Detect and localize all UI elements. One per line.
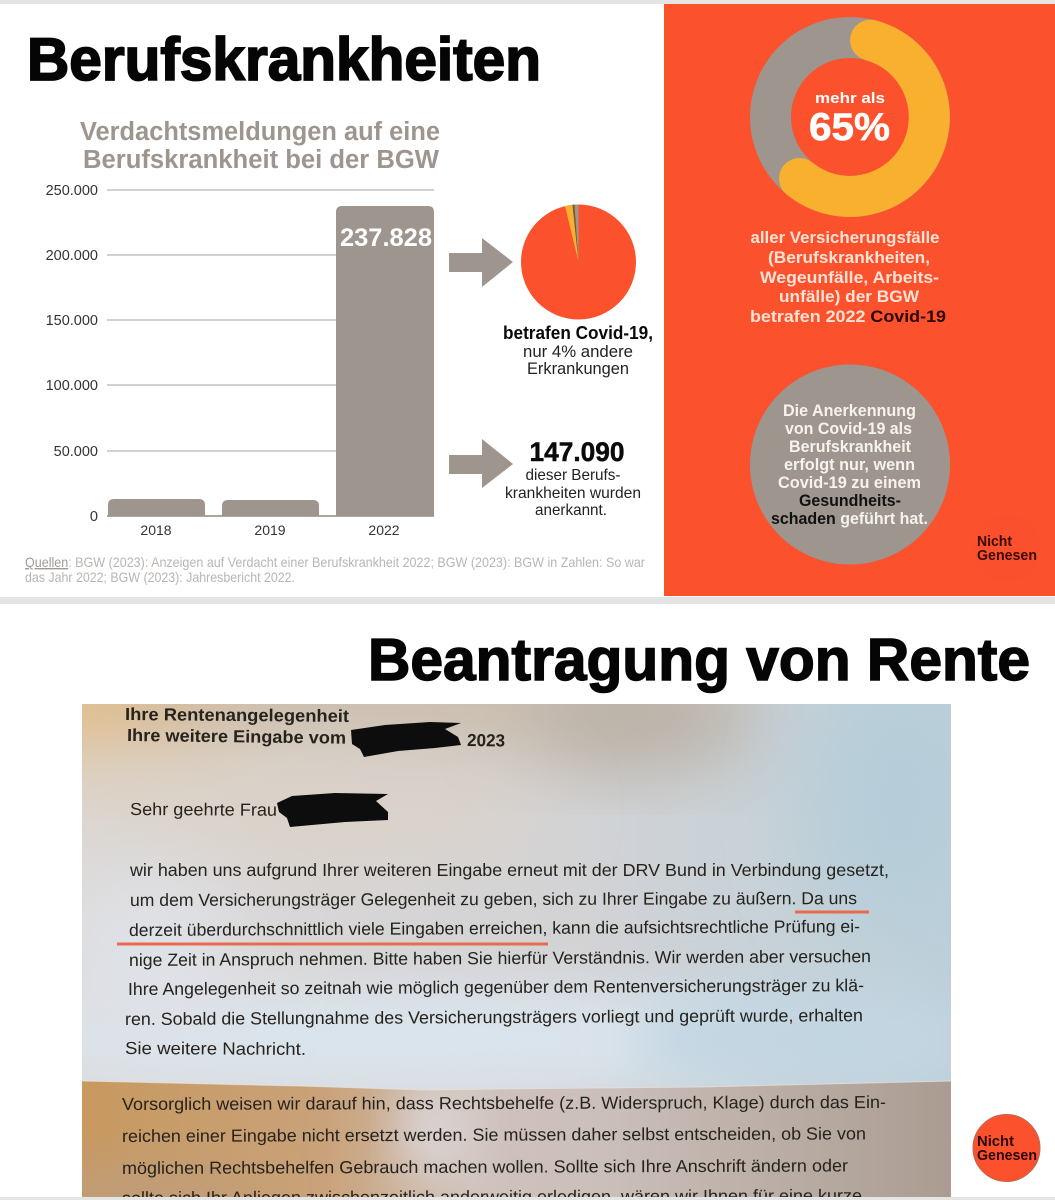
subject lines: Ihre weitere Eingabe vom [127, 725, 346, 748]
y axis labels: 100.000 [46, 378, 98, 394]
logo: Nicht Genesen [974, 515, 1040, 581]
body paragraph 2: Vorsorglich weisen wir darauf hin, dass Rechtsbehelfe (z.B. Widerspruch, Klage) durch das Ein- [122, 1092, 886, 1114]
y axis labels: 0 [90, 509, 98, 525]
recognised cases callout: krankheiten wurden [505, 485, 641, 502]
recognised cases callout: anerkannt. [535, 502, 607, 519]
callout text: von Covid-19 als [785, 420, 912, 438]
body paragraph 2: möglichen Rechtsbehelfen Gebrauch machen wollen. Sollte sich Ihre Anschrift ändern oder [122, 1155, 848, 1178]
bar chart: Verdachtsmeldungen [46, 183, 434, 538]
body paragraph 1 [125, 860, 889, 1059]
sources: Quellen: BGW (2023): Anzeigen auf Verdacht einer Berufskrankheit 2022; BGW (2023): BGW in Zahlen: So war [25, 554, 645, 570]
donut explanation text: (Berufskrankheiten, [768, 248, 930, 267]
recognised cases callout [505, 437, 641, 519]
photo: letter from the pension authority [82, 704, 951, 1197]
logo: Nicht Genesen: Genesen [977, 548, 1037, 564]
body paragraph 1: wir haben uns aufgrund Ihrer weiteren Eingabe erneut mit der DRV Bund in Verbindung gesetzt, [129, 860, 889, 880]
x axis labels: 2019 [254, 522, 286, 538]
body paragraph 1: derzeit überdurchschnittlich viele Eingaben erreichen, kann die aufsichtsrechtliche Prüfung ei- [129, 916, 860, 940]
x axis labels: 2018 [140, 522, 172, 538]
salutation: Sehr geehrte Frau [130, 799, 277, 820]
redaction: name [277, 793, 388, 827]
body paragraph 1: um dem Versicherungsträger Gelegenheit zu geben, sich zu Ihrer Eingabe zu äußern. Da uns [130, 888, 857, 910]
callout text: Die Anerkennung [783, 402, 916, 420]
y axis labels [46, 183, 98, 525]
body paragraph 1: ren. Sobald die Stellungnahme des Versicherungsträgers vorliegt und geprüft wurde, erhalten [125, 1005, 863, 1029]
chart heading: Verdachtsmeldungen auf eine [80, 118, 440, 146]
sources: das Jahr 2022; BGW (2023): Jahresbericht 2022. [25, 569, 295, 585]
bar value 237.828: 237.828 [340, 224, 432, 252]
fold crease [82, 1081, 951, 1090]
recognised cases callout: 147.090 [530, 437, 624, 467]
panel: Berufskrankheiten chart [25, 26, 653, 585]
donut explanation text: unfälle) der BGW [779, 287, 920, 306]
logo: Nicht Genesen badge: Nicht [977, 1133, 1014, 1150]
grey circle callout [750, 364, 950, 564]
bar 2022 [336, 206, 434, 516]
arrow to pie chart [449, 238, 513, 287]
x axis labels: 2022 [368, 522, 400, 538]
title: Berufskrankheiten: Berufskrankheiten [27, 26, 541, 93]
bar 2019 [222, 500, 319, 516]
callout text: Gesundheits- [799, 492, 901, 510]
donut explanation text: betrafen 2022 Covid-19 [750, 307, 946, 326]
body paragraph 1: Sie weitere Nachricht. [125, 1038, 306, 1059]
x axis labels [140, 522, 400, 538]
panel: orange sidebar [664, 4, 1055, 596]
pie caption: betrafen Covid-19, [503, 323, 653, 343]
title: Beantragung von Rente: Beantragung von Rente [368, 627, 1030, 693]
body paragraph 1: Ihre Angelegenheit so zeitnah wie möglich gegenüber dem Rentenversicherungsträger zu klä- [128, 975, 864, 999]
y axis labels: 150.000 [46, 313, 98, 329]
highlight underline: derzeit ueberdurchschnittlich viele Eingaben erreichen [117, 942, 548, 946]
subject lines: 2023 [467, 730, 505, 750]
subject lines [126, 707, 504, 747]
pie chart: Covid-19 share [521, 204, 636, 320]
sources [25, 554, 645, 585]
y axis labels: 250.000 [46, 183, 98, 199]
redaction: date [351, 722, 461, 757]
callout text: schaden geführt hat. [771, 510, 928, 528]
callout text: Berufskrankheit [789, 438, 911, 456]
arrow to recognised cases [449, 439, 513, 488]
logo: Nicht Genesen: Nicht [977, 534, 1012, 550]
donut chart: 65% [770, 38, 930, 196]
body paragraph 2: reichen einer Eingabe nicht ersetzt werden. Sie müssen daher selbst entscheiden, ob Sie von [122, 1123, 866, 1146]
donut label: 65% [809, 106, 890, 149]
chart heading: Berufskrankheit bei der BGW [83, 146, 440, 174]
body paragraph 2 [122, 1092, 886, 1200]
subject lines: Ihre Rentenangelegenheit [125, 704, 349, 726]
bar 2018 [108, 499, 205, 516]
donut explanation text: aller Versicherungsfälle [750, 228, 940, 247]
body paragraph 1: nige Zeit in Anspruch nehmen. Bitte haben Sie hierfür Verständnis. Wir werden aber versuchen [129, 946, 871, 970]
logo: Nicht Genesen badge [973, 1114, 1040, 1182]
highlight underline: Da uns [795, 910, 869, 914]
pie caption: nur 4% andere [523, 342, 633, 361]
callout text [771, 402, 928, 528]
logo: Nicht Genesen badge: Genesen [977, 1147, 1037, 1164]
chart heading [80, 118, 440, 174]
callout text: erfolgt nur, wenn [784, 456, 915, 474]
recognised cases callout: dieser Berufs- [526, 467, 620, 484]
callout text: Covid-19 zu einem [778, 474, 921, 492]
pie caption: Erkrankungen [527, 359, 629, 378]
y axis labels: 50.000 [54, 444, 98, 460]
donut label: mehr als [815, 90, 885, 107]
donut explanation text: Wegeunfälle, Arbeits- [760, 268, 939, 287]
donut explanation text [750, 228, 946, 326]
letter text [122, 704, 889, 1200]
y axis labels: 200.000 [46, 248, 98, 264]
pie caption [503, 323, 653, 378]
